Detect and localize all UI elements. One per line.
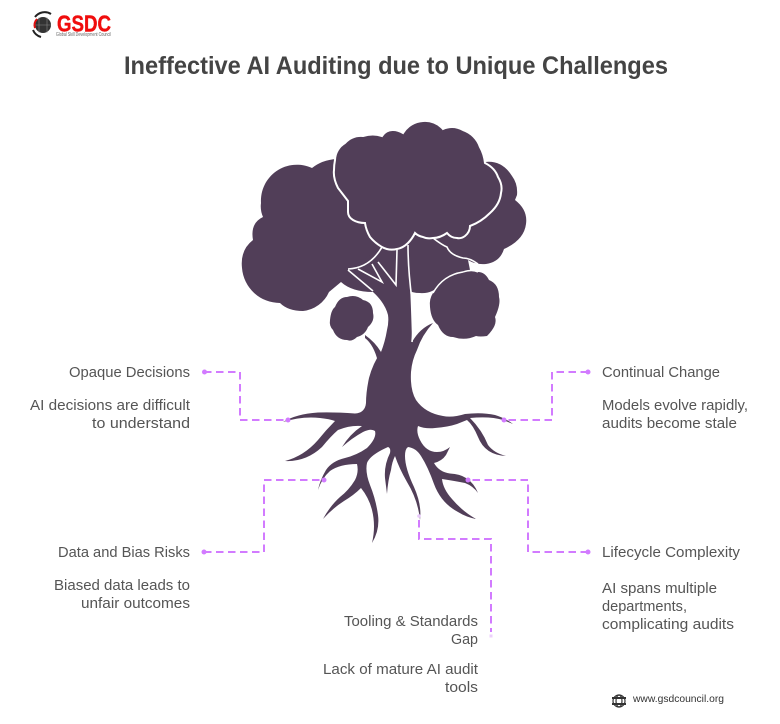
label: Data and Bias Risks: unfair outcomes <box>81 596 190 612</box>
connector: Continual Change <box>502 370 590 422</box>
logo: GSDC: GSDC <box>57 10 111 36</box>
label: Opaque Decisions: to understand <box>92 416 190 432</box>
logo: GSDC: Global Skill Development Council <box>56 32 111 38</box>
small left canopy <box>330 296 373 341</box>
label: Lifecycle Complexity: Lifecycle Complexity <box>602 545 741 561</box>
small right canopy <box>430 270 500 339</box>
label: Opaque Decisions: Opaque Decisions <box>69 365 190 381</box>
footer: website <box>612 694 724 707</box>
label: Data and Bias Risks <box>54 545 190 612</box>
white canopy and branch lines <box>348 238 478 342</box>
icon: globe <box>612 695 626 707</box>
label: Data and Bias Risks: Data and Bias Risks <box>58 545 190 561</box>
canopy outline (front) <box>334 121 502 250</box>
back-right canopy <box>400 162 526 293</box>
connector: Tooling and Standards Gap <box>417 514 492 638</box>
connector: Data and Bias Risks <box>202 478 326 554</box>
label: Lifecycle Complexity: complicating audits <box>602 617 734 633</box>
tree illustration <box>242 121 526 543</box>
label: Continual Change: Continual Change <box>602 365 720 381</box>
footer: website: www.gsdcouncil.org <box>632 694 724 705</box>
label: Tooling and Standards Gap <box>323 614 478 696</box>
label: Continual Change: audits become stale <box>602 416 737 432</box>
title: Ineffective AI Auditing due to Unique Challenges <box>124 52 668 80</box>
label: Tooling and Standards Gap: Gap <box>451 632 478 648</box>
label: Continual Change <box>602 365 748 432</box>
label: Tooling and Standards Gap: Lack of mature AI audit <box>323 662 478 678</box>
label: Lifecycle Complexity: departments, <box>602 599 687 615</box>
label: Continual Change: Models evolve rapidly, <box>602 398 748 414</box>
label: Opaque Decisions <box>30 365 190 432</box>
label: Lifecycle Complexity <box>602 545 741 633</box>
label: Opaque Decisions: AI decisions are difficult <box>30 398 190 414</box>
back-left canopy <box>242 159 400 311</box>
connector: Opaque Decisions <box>202 370 290 422</box>
connector: Lifecycle Complexity <box>466 478 590 554</box>
label: Tooling and Standards Gap: tools <box>445 680 478 696</box>
small stem left <box>365 335 381 362</box>
label: Data and Bias Risks: Biased data leads to <box>54 578 190 594</box>
trunk and roots <box>283 245 513 543</box>
label: Tooling and Standards Gap: Tooling & Standards <box>344 614 478 630</box>
label: Lifecycle Complexity: AI spans multiple <box>602 581 717 597</box>
logo: GSDC <box>33 10 111 38</box>
